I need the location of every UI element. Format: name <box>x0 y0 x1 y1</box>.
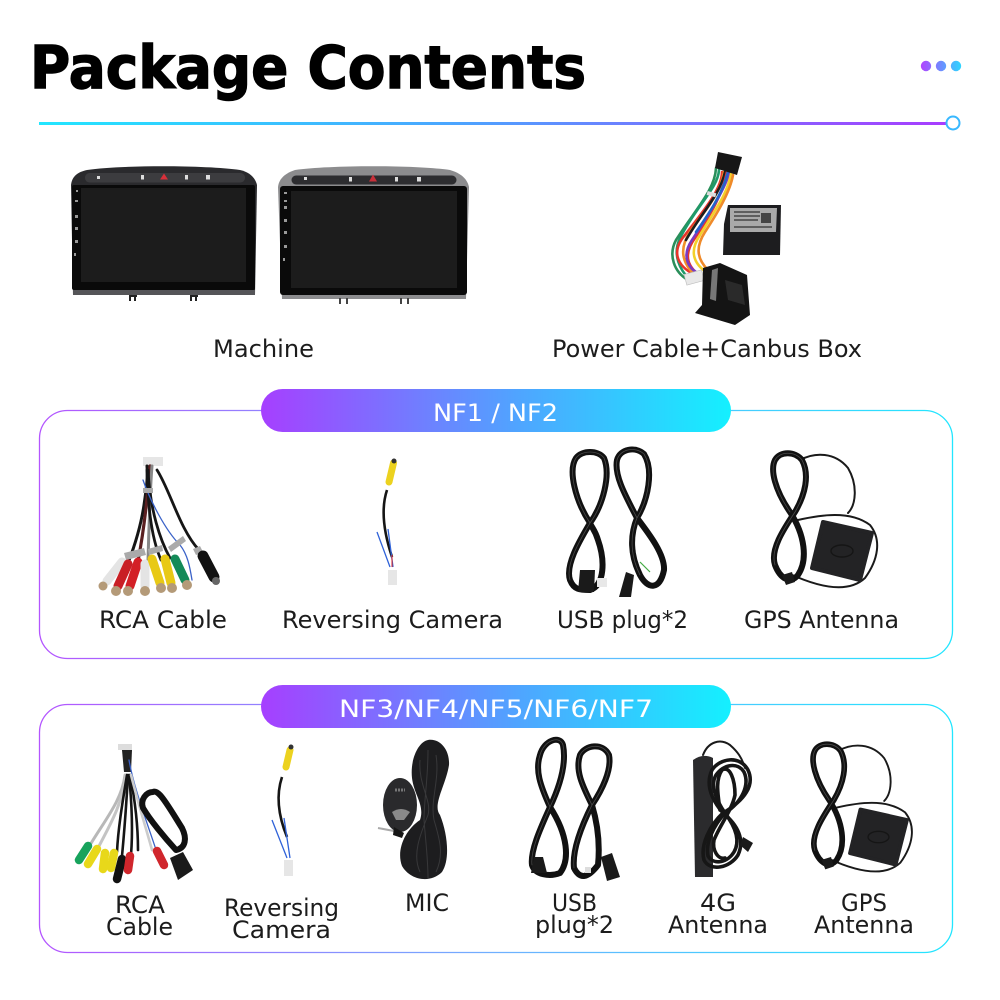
power cable and canbus box <box>672 152 781 325</box>
USB plug label second panel: USB <box>552 889 597 917</box>
panel: NF1 / NF2 <box>40 389 952 658</box>
RCA cable <box>98 457 220 596</box>
pill heading: NF3/NF4/NF5/NF6/NF7 <box>261 685 731 728</box>
USB plugs <box>569 449 664 597</box>
USB plug label: USB plug*2 <box>557 606 688 634</box>
4G antenna <box>693 742 753 877</box>
power cable label: Power Cable+Canbus Box <box>552 335 862 363</box>
machine: silver frame unit <box>278 166 469 304</box>
panel: NF3 to NF7 <box>40 685 952 952</box>
RCA label second panel: RCA <box>115 891 166 919</box>
RCA label second panel: Cable <box>106 913 173 941</box>
RCA cable label: RCA Cable <box>99 606 227 634</box>
icon: three dots <box>921 61 961 71</box>
RCA cable with USB <box>79 744 193 880</box>
GPS antenna label second panel: GPS <box>841 889 887 917</box>
reversing camera label second panel <box>224 894 339 944</box>
GPS antenna label: GPS Antenna <box>744 606 899 634</box>
machine label: Machine <box>213 335 314 363</box>
pill heading: NF1 / NF2: NF1 / NF2 <box>433 399 558 427</box>
MIC <box>378 740 449 879</box>
pill heading: NF3/NF4/NF5/NF6/NF7: NF3/NF4/NF5/NF6/NF7 <box>339 695 653 723</box>
MIC label: MIC <box>405 889 449 917</box>
pill heading: NF1 / NF2 <box>261 389 731 432</box>
USB plug label second panel: plug*2 <box>535 911 614 939</box>
4G antenna label <box>668 889 768 939</box>
reversing camera label second panel: Reversing <box>224 894 339 922</box>
machine: black frame unit <box>71 166 257 301</box>
GPS antenna <box>773 453 877 587</box>
GPS antenna label second panel: Antenna <box>814 911 914 939</box>
USB plugs second panel <box>531 740 620 881</box>
4G antenna label: 4G <box>700 889 736 917</box>
reversing camera cable <box>377 458 397 585</box>
reversing camera cable second panel <box>272 744 294 876</box>
reversing camera label second panel: Camera <box>232 916 331 944</box>
header gradient rule <box>39 116 960 130</box>
GPS antenna second panel <box>813 744 912 872</box>
title: Package Contents <box>30 33 586 102</box>
USB plug label second panel <box>535 889 614 939</box>
4G antenna label: Antenna <box>668 911 768 939</box>
GPS antenna label second panel <box>814 889 914 939</box>
reversing camera label: Reversing Camera <box>282 606 503 634</box>
RCA label second panel <box>106 891 173 941</box>
